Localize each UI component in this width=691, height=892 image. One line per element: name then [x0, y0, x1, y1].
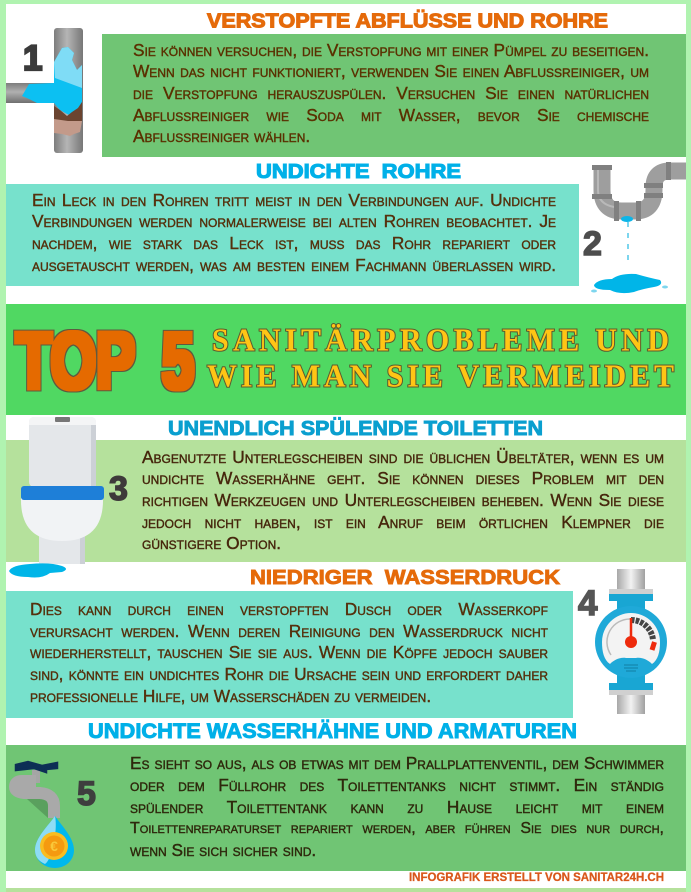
icon: dripping faucet with coin: € [50, 838, 58, 854]
title: top 5: 5 [162, 316, 194, 405]
text block: verstopfte abflüsse: Abflussreiniger wie Soda mit Wasser, bevor Sie chemische [133, 105, 649, 125]
panel: title banner [6, 304, 686, 415]
text block: unendlich spülende toiletten: Abgenutzte Unterlegscheiben sind die üblichen Übeltäter, wenn es um [142, 446, 664, 466]
title [16, 316, 674, 405]
panel: niedriger wasserdruck text [6, 591, 573, 718]
title: top 5: TOP [16, 316, 135, 405]
text block: undichte rohre: Ein Leck in den Rohren tritt meist in den Verbindungen auf. Undichte [32, 190, 556, 210]
number 2: 2 [583, 225, 602, 263]
panel: undichte rohre text [6, 184, 579, 286]
icon: dripping faucet with coin [15, 762, 74, 868]
icon: water pressure gauge [595, 569, 667, 714]
icon: clogged pipe [6, 28, 83, 153]
title: sanitärprobleme und wie man sie vermeidet [207, 323, 674, 394]
footer band [6, 888, 686, 892]
number 3: 3 [109, 470, 128, 508]
text block: undichte rohre [32, 190, 556, 275]
icon: leaking u-trap pipe [591, 162, 686, 293]
text block: niedriger wasserdruck: Dies kann durch einen verstopften Dusch oder Wasserkopf [30, 599, 548, 619]
number 4: 4 [578, 584, 598, 623]
panel: verstopfte abflüsse text [102, 34, 686, 157]
text block: niedriger wasserdruck: verursacht werden. Wenn deren Reinigung den Wasserdruck nicht [30, 621, 548, 641]
text block: undichte rohre: nachdem, wie stark das Leck ist, muss das Rohr repariert oder [32, 233, 556, 253]
heading: undichte wasserhähne und armaturen: UNDICHTE WASSERHÄHNE UND ARMATUREN [88, 720, 577, 743]
text block: niedriger wasserdruck: sind, könnte ein undichtes Rohr die Ursache sein und erfordert daher [30, 664, 548, 684]
text block: verstopfte abflüsse [132, 40, 649, 146]
title: sanitärprobleme und wie man sie vermeidet: SANITÄRPROBLEME UND [212, 323, 669, 358]
text block: niedriger wasserdruck: professionelle Hilfe, um Wasserschäden zu vermeiden. [30, 686, 431, 706]
heading: niedriger wasserdruck: NIEDRIGER WASSERDRUCK [250, 566, 560, 589]
text block: undichte wasserhähne: Es sieht so aus, als ob etwas mit dem Prallplattenventil, dem Schwimmer [130, 753, 664, 773]
text block: unendlich spülende toiletten: jedoch nicht haben, ist ein Anruf beim örtlichen Klempner die [142, 512, 664, 532]
text block: unendlich spülende toiletten: undichte Wasserhähne geht. Sie können dieses Problem mit den [142, 468, 664, 488]
number 1: 1 [23, 39, 42, 78]
text block: undichte rohre: ausgetauscht werden, was am besten einem Fachmann überlassen wird. [32, 255, 556, 275]
text block: verstopfte abflüsse: Wenn das nicht funktioniert, verwenden Sie einen Abflussreiniger, um [133, 61, 649, 81]
icon: toilet [9, 417, 104, 578]
text block: undichte wasserhähne: wenn Sie sich sicher sind. [130, 840, 316, 860]
panel: unendlich spülende toiletten text [6, 440, 686, 562]
text block: unendlich spülende toiletten [142, 446, 664, 553]
text block: undichte wasserhähne [130, 753, 664, 860]
panel: undichte wasserhähne text [6, 745, 686, 871]
text block: unendlich spülende toiletten: richtigen Werkzeugen und Unterlegscheiben beheben. Wenn Sie diese [142, 490, 664, 510]
text block: niedriger wasserdruck: wiederherstellt, tauschen Sie sie aus. Wenn die Köpfe jedoch sauber [30, 642, 548, 662]
heading: undichte rohre: UNDICHTE ROHRE [256, 160, 461, 183]
footer credit: INFOGRAFIK ERSTELLT VON SANITAR24H.CH [409, 872, 664, 884]
text block: undichte wasserhähne: Toilettenreparaturset repariert werden, aber führen Sie dies nur durch, [130, 820, 664, 837]
number 5: 5 [77, 775, 96, 813]
text block: verstopfte abflüsse: die Verstopfung herauszuspülen. Versuchen Sie einen natürlichen [133, 83, 649, 103]
text block: verstopfte abflüsse: Abflussreiniger wählen. [133, 126, 310, 146]
text block: undichte rohre: Verbindungen werden normalerweise bei alten Rohren beobachtet. Je [32, 211, 556, 231]
title: sanitärprobleme und wie man sie vermeidet: WIE MAN SIE VERMEIDET [207, 359, 674, 394]
text block: undichte wasserhähne: spülender Toilettentank kann zu Hause leicht mit einem [130, 797, 664, 817]
heading: unendlich spülende toiletten: UNENDLICH SPÜLENDE TOILETTEN [168, 417, 543, 440]
text block: niedriger wasserdruck [30, 599, 548, 706]
text block: undichte wasserhähne: oder dem Füllrohr des Toilettentanks nicht stimmt. Ein ständig [130, 775, 664, 795]
text block: unendlich spülende toiletten: günstigere Option. [142, 533, 281, 553]
text block: verstopfte abflüsse: Sie können versuchen, die Verstopfung mit einer Pümpel zu beseitigen. [133, 40, 649, 60]
heading: verstopfte abflüsse und rohre: VERSTOPFTE ABFLÜSSE UND ROHRE [207, 10, 608, 32]
